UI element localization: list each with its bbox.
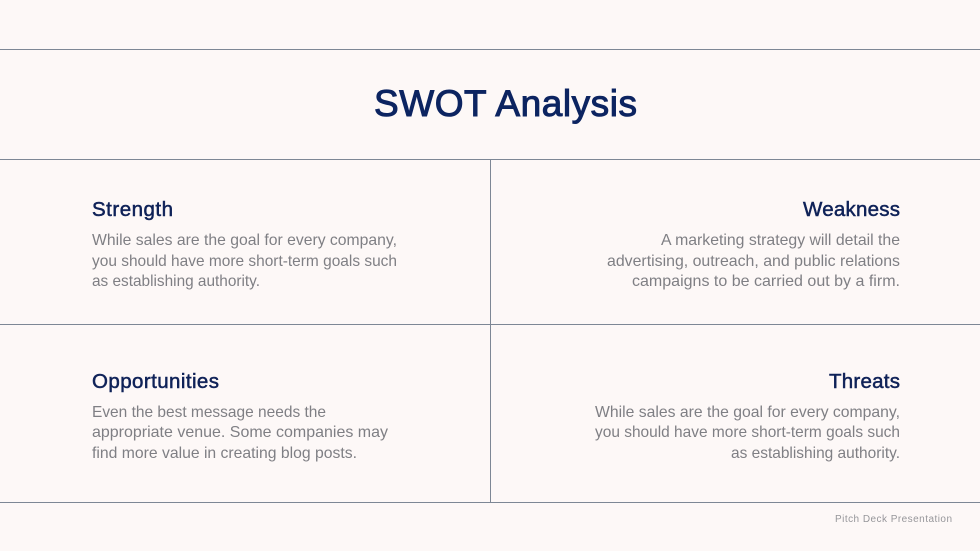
heading: strength: Strength xyxy=(92,198,173,221)
text block: weakness description xyxy=(607,232,900,290)
footer label: Pitch Deck Presentation xyxy=(835,514,952,525)
panel: threats xyxy=(595,370,900,462)
title: SWOT Analysis xyxy=(374,83,637,124)
text block: opportunities description: appropriate venue. Some companies may xyxy=(92,424,388,441)
text block: weakness description: A marketing strategy will detail the xyxy=(661,232,900,249)
text block: threats description xyxy=(595,404,900,462)
text block: strength description: as establishing authority. xyxy=(92,273,260,290)
heading: opportunities: Opportunities xyxy=(92,370,219,393)
text block: weakness description: campaigns to be carried out by a firm. xyxy=(632,273,900,290)
text block: threats description: as establishing authority. xyxy=(731,445,900,462)
text block: strength description: While sales are the goal for every company, xyxy=(92,232,397,249)
text block: opportunities description: Even the best message needs the xyxy=(92,404,326,421)
text block: threats description: you should have more short-term goals such xyxy=(595,424,900,441)
text block: opportunities description: find more value in creating blog posts. xyxy=(92,445,357,462)
text block: strength description xyxy=(92,232,397,290)
panel: opportunities xyxy=(92,370,388,462)
panel: weakness xyxy=(607,198,900,290)
heading: weakness: Weakness xyxy=(803,198,900,221)
text block: threats description: While sales are the goal for every company, xyxy=(595,404,900,421)
text block: weakness description: advertising, outreach, and public relations xyxy=(607,253,900,270)
text block: opportunities description xyxy=(92,404,388,462)
panel: strength xyxy=(92,198,397,290)
text block: strength description: you should have more short-term goals such xyxy=(92,253,397,270)
heading: threats: Threats xyxy=(829,370,900,393)
